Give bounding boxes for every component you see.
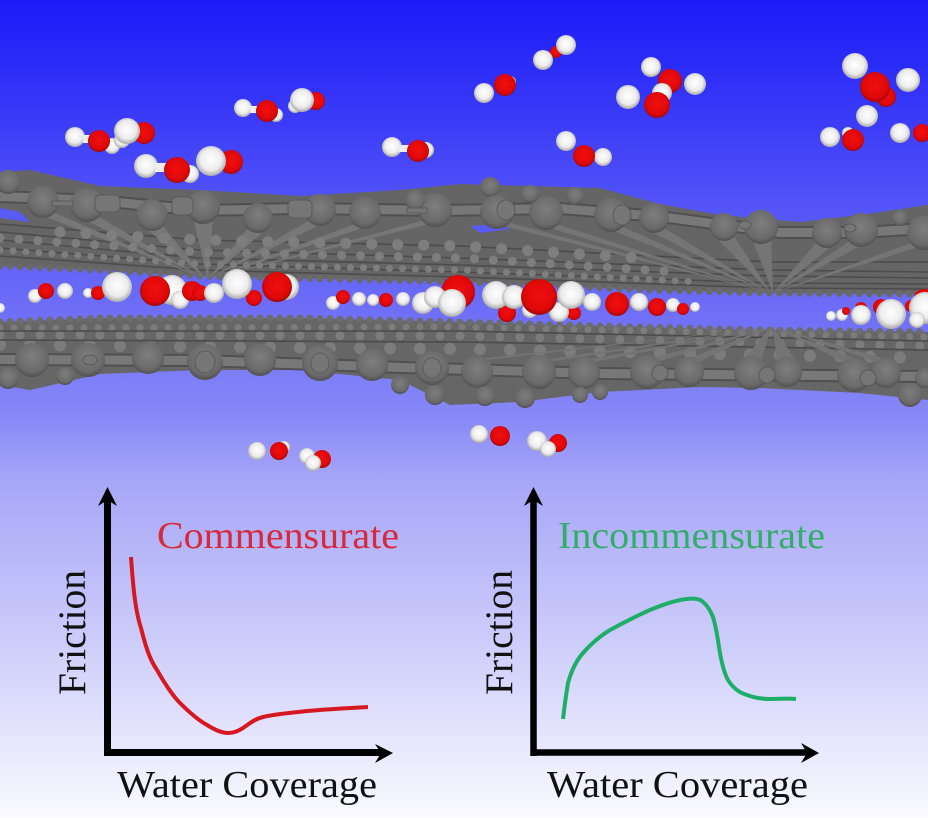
- bond ends: [52, 195, 856, 232]
- water molecules between sheets: [0, 269, 928, 329]
- front atoms: [0, 170, 928, 250]
- y axis label: Friction: [51, 570, 94, 695]
- sheet body: [0, 318, 928, 405]
- x axis label: Water Coverage: [547, 764, 808, 806]
- x axis label: Water Coverage: [117, 764, 377, 806]
- atom beads on columns: [0, 232, 700, 282]
- front bonds: [0, 196, 928, 232]
- water molecule: [382, 137, 434, 162]
- water molecules below sheets: [248, 425, 567, 471]
- water molecule: [288, 88, 325, 113]
- heading: Incommensurate: Incommensurate: [558, 515, 825, 557]
- water cluster: [616, 57, 706, 118]
- axes: [524, 487, 819, 763]
- water molecule: [114, 118, 155, 148]
- green friction curve: [563, 599, 796, 719]
- bond ends: [83, 351, 876, 386]
- blue gap slivers: [0, 208, 510, 233]
- front bonds: [0, 359, 928, 376]
- front atoms: [0, 342, 928, 408]
- water molecules above sheets: [65, 35, 928, 183]
- upper graphene sheet: [0, 170, 928, 294]
- water molecule: [890, 123, 928, 143]
- water molecule: [533, 35, 576, 70]
- water molecule: [65, 127, 120, 154]
- back rows of atoms: [0, 327, 928, 358]
- heading: Commensurate: Commensurate: [157, 515, 399, 557]
- streak lines: [0, 224, 928, 289]
- converging atom columns, left side: [33, 212, 445, 279]
- y axis label: Friction: [478, 570, 521, 695]
- water molecule: [556, 131, 612, 167]
- converging atom columns, right side: [467, 327, 896, 362]
- converging atom columns, right side: [487, 222, 928, 293]
- sheet body: [0, 170, 928, 294]
- water molecule: [134, 154, 199, 183]
- lower graphene sheet: [0, 318, 928, 408]
- ragged lower edge: [0, 266, 928, 294]
- red friction curve: [131, 557, 368, 733]
- water cluster: [842, 53, 920, 127]
- axes: [98, 487, 393, 763]
- water molecule: [820, 127, 864, 151]
- chart: incommensurate: [478, 487, 825, 806]
- chart: commensurate: [51, 487, 399, 806]
- streak lines: [0, 331, 928, 350]
- water molecule: [196, 146, 243, 176]
- water molecule: [474, 74, 516, 103]
- ragged upper edge: [0, 318, 928, 332]
- water molecule: [234, 99, 283, 122]
